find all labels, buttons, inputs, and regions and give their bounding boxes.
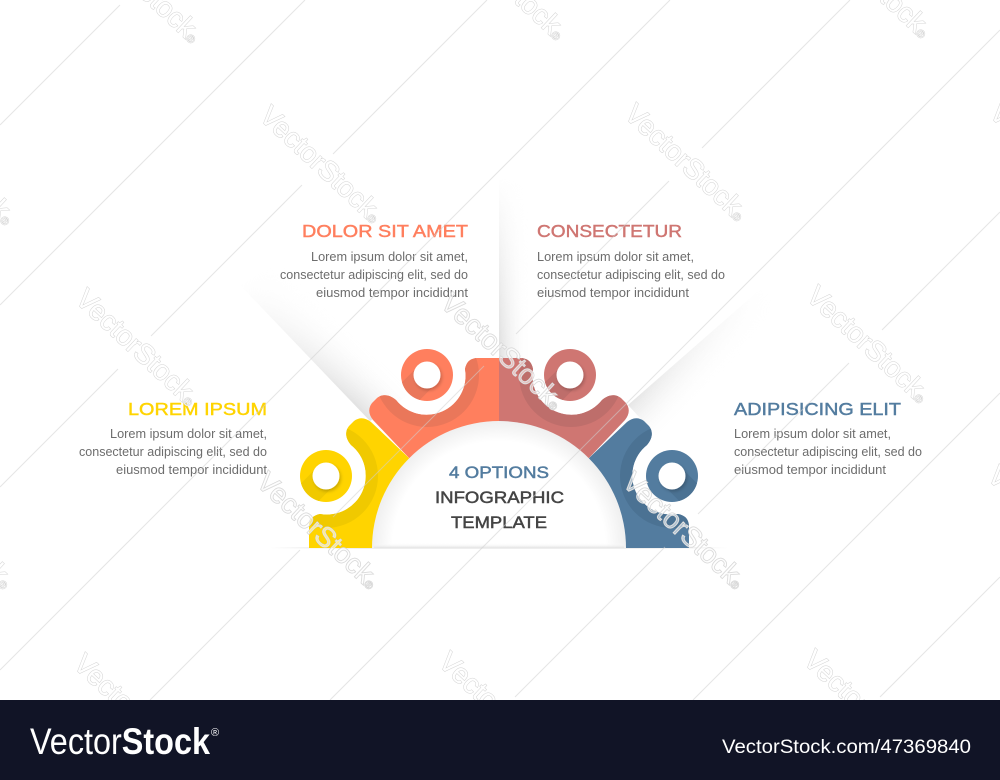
baseline [270, 547, 728, 548]
ring: blue [646, 450, 700, 504]
text block: lorem ipsum: eiusmod tempor incididunt [116, 463, 268, 477]
watermarks: VectorStock® [433, 646, 568, 775]
text block: consectetur: consectetur adipiscing elit, sed do [537, 268, 725, 282]
fold shadow: upper left [277, 322, 380, 421]
ring: yellow [298, 450, 352, 504]
petal: rose [499, 358, 629, 458]
fold shadow: centre vertical [499, 226, 514, 358]
watermarks: VectorStock® [801, 280, 936, 409]
watermarks: VectorStock® [251, 466, 386, 595]
centre semicircle [372, 421, 626, 548]
text block: dolor sit amet [280, 221, 469, 300]
footer logo: VectorStock [30, 721, 210, 762]
centre title: 4 OPTIONS [449, 463, 549, 482]
text block: lorem ipsum: consectetur adipiscing elit, sed do [79, 445, 267, 459]
watermarks: VectorStock® [619, 98, 754, 227]
text block: dolor sit amet: Lorem ipsum dolor sit amet, [311, 250, 468, 264]
ring: coral [399, 349, 453, 403]
text block: consectetur: CONSECTETUR [537, 221, 682, 241]
fold shadow: upper right [628, 336, 708, 419]
text block: adipisicing elit: eiusmod tempor incididunt [734, 463, 887, 477]
text block: dolor sit amet: DOLOR SIT AMET [302, 221, 468, 241]
footer image id: VectorStock.com/47369840 [722, 737, 971, 758]
text block: consectetur: eiusmod tempor incididunt [537, 286, 690, 300]
text block: adipisicing elit: consectetur adipiscing elit, sed do [734, 445, 922, 459]
centre title: TEMPLATE [451, 513, 547, 532]
watermarks: VectorStock® [617, 466, 752, 595]
watermarks: VectorStock® [798, 644, 933, 773]
petal: blue [588, 418, 689, 548]
text block: dolor sit amet: consectetur adipiscing elit, sed do [280, 268, 468, 282]
watermarks: VectorStock® [70, 283, 205, 412]
watermarks: VectorStock® [435, 287, 570, 416]
text block: lorem ipsum: LOREM IPSUM [128, 399, 267, 419]
text block: dolor sit amet: eiusmod tempor incididunt [316, 286, 469, 300]
text block: adipisicing elit: ADIPISICING ELIT [734, 399, 901, 419]
footer bar [0, 700, 1000, 780]
petal: yellow [309, 418, 410, 548]
footer logo: ® [211, 727, 219, 739]
text block: consectetur [537, 221, 725, 300]
petal: coral [369, 358, 499, 458]
centre title [435, 463, 564, 532]
text block: consectetur: Lorem ipsum dolor sit amet, [537, 250, 694, 264]
watermarks: VectorStock® [68, 648, 203, 777]
text block: lorem ipsum: Lorem ipsum dolor sit amet, [110, 427, 267, 441]
text block: lorem ipsum [79, 399, 268, 477]
ring: rose [542, 349, 596, 403]
centre base shading [374, 543, 624, 548]
centre title: INFOGRAPHIC [435, 488, 564, 507]
text block: adipisicing elit: Lorem ipsum dolor sit amet, [734, 427, 891, 441]
text block: adipisicing elit [734, 399, 922, 477]
watermarks: VectorStock® [254, 100, 389, 229]
